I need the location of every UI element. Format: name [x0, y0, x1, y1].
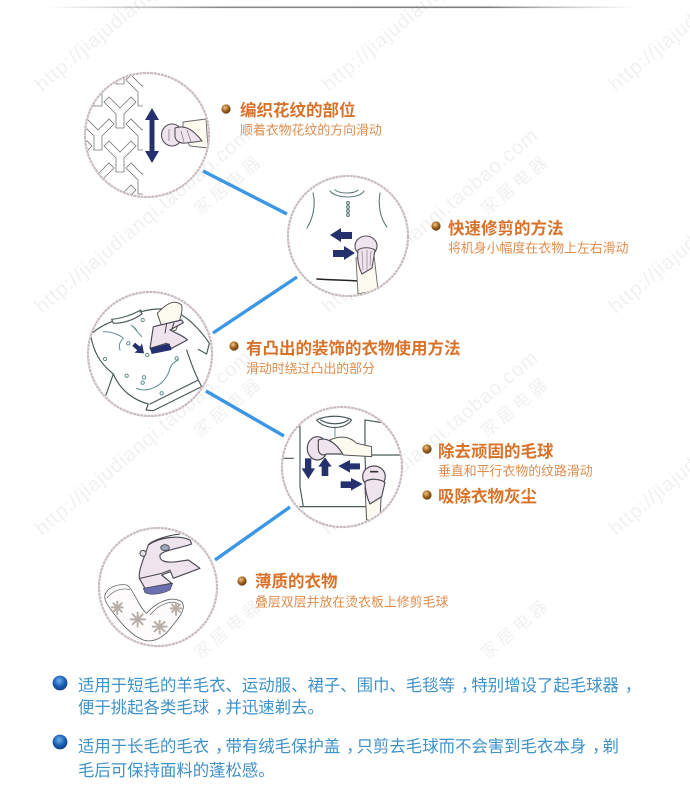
note: long wool	[53, 735, 619, 780]
label: woven pattern	[221, 100, 382, 138]
watermark layer: 家居电器	[477, 595, 554, 663]
panel: quick trim	[288, 176, 408, 296]
watermark layer: 家居电器	[190, 595, 267, 663]
note: short wool	[53, 676, 641, 717]
label: raised decorations: 滑动时绕过凸出的部分	[246, 361, 375, 376]
icon: shaver and hand	[162, 119, 208, 148]
label: dust removal: 吸除衣物灰尘	[438, 486, 537, 506]
note: long wool: 毛后可保持面料的蓬松感。	[78, 762, 275, 780]
label: woven pattern: 顺着衣物花纹的方向滑动	[240, 122, 382, 138]
garment outline	[307, 190, 387, 281]
label: stubborn pills	[422, 441, 593, 478]
drawing: shaver	[139, 537, 200, 588]
label: stubborn pills: 除去顽固的毛球	[438, 441, 554, 461]
watermark layer: http://jiajudianqi.taobao.com	[31, 125, 255, 318]
drawing: sock	[105, 585, 183, 641]
watermark layer: 家居电器	[190, 151, 267, 219]
panel: raised decorations	[88, 292, 212, 416]
icon: vertical double arrow	[145, 108, 159, 163]
panel: woven pattern	[85, 73, 209, 197]
note: long wool: 适用于长毛的毛衣 ，带有绒毛保护盖 ，只剪去毛球而不会害到毛衣本身 ，剃	[78, 738, 619, 756]
watermark layer: 家居电器	[477, 373, 554, 441]
label: woven pattern: 编织花纹的部位	[240, 100, 356, 120]
drawing: snowflakes	[112, 602, 182, 633]
panel: thin garment	[99, 528, 217, 646]
watermark layer: http://jiajudianqi.taobao.com	[31, 347, 255, 540]
label: thin garment: 薄质的衣物	[255, 571, 338, 591]
label: thin garment: 叠层双层并放在烫衣板上修剪毛球	[255, 594, 448, 610]
watermark layer: 家居电器	[190, 373, 267, 441]
watermark layer: http://jiajudianqi.taobao.com	[318, 347, 542, 540]
label: quick trim: 将机身小幅度在衣物上左右滑动	[448, 240, 629, 256]
label: thin garment	[237, 571, 448, 610]
sweater drawing	[283, 416, 400, 520]
note: short wool: 适用于短毛的羊毛衣、运动服、裙子、围巾、毛毯等 ，特别增设了起毛球器 ，	[78, 677, 641, 695]
woven pattern texture	[85, 73, 143, 197]
note: short wool: 便于挑起各类毛球 ，并迅速剃去。	[78, 699, 324, 717]
top rule	[45, 6, 635, 8]
label: raised decorations	[229, 338, 460, 376]
label: raised decorations: 有凸出的装饰的衣物使用方法	[246, 338, 460, 358]
icon: right arrow	[333, 246, 355, 260]
panel: stubborn pills	[282, 407, 402, 527]
sweater drawing	[91, 302, 209, 411]
connector lines	[203, 171, 297, 560]
label: quick trim	[431, 218, 629, 256]
label: quick trim: 快速修剪的方法	[448, 218, 564, 238]
icon: left arrow	[330, 228, 352, 242]
label: stubborn pills: 垂直和平行衣物的纹路滑动	[438, 464, 593, 478]
watermark layer: 家居电器	[477, 151, 554, 219]
watermark layer	[31, 0, 690, 663]
icon: shaver and hand	[355, 236, 378, 294]
watermark layer: http://jiajudianqi.taobao.com	[318, 125, 542, 318]
